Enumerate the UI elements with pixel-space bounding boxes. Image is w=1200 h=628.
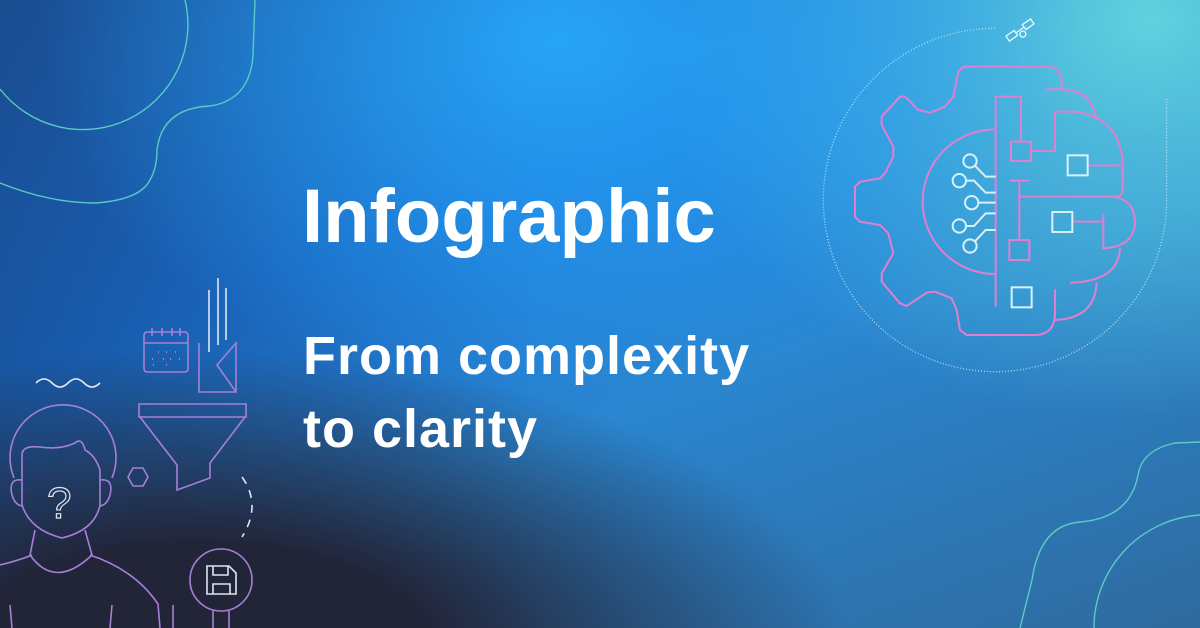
icon: hexagon [128, 468, 148, 486]
icon: satellite [1006, 19, 1037, 45]
icon: funnel [139, 404, 246, 490]
icon: calendar [144, 328, 188, 372]
icon: question mark: ? [47, 479, 71, 528]
icon: magnifier with floppy disk [190, 549, 252, 628]
icon: wave [36, 379, 100, 387]
illustration: person with question mark [0, 405, 173, 628]
subtitle [303, 326, 750, 459]
decoration: top-left gear outline [0, 0, 255, 203]
dashed arc [242, 477, 252, 537]
icon: falling document [199, 278, 236, 392]
subtitle: to clarity [303, 399, 538, 459]
icon: gear-brain illustration [823, 28, 1167, 372]
dotted orbit [823, 28, 1167, 372]
title: Infographic [302, 174, 716, 259]
subtitle: From complexity [303, 326, 750, 386]
decoration: bottom-right gear outline [1020, 442, 1200, 628]
